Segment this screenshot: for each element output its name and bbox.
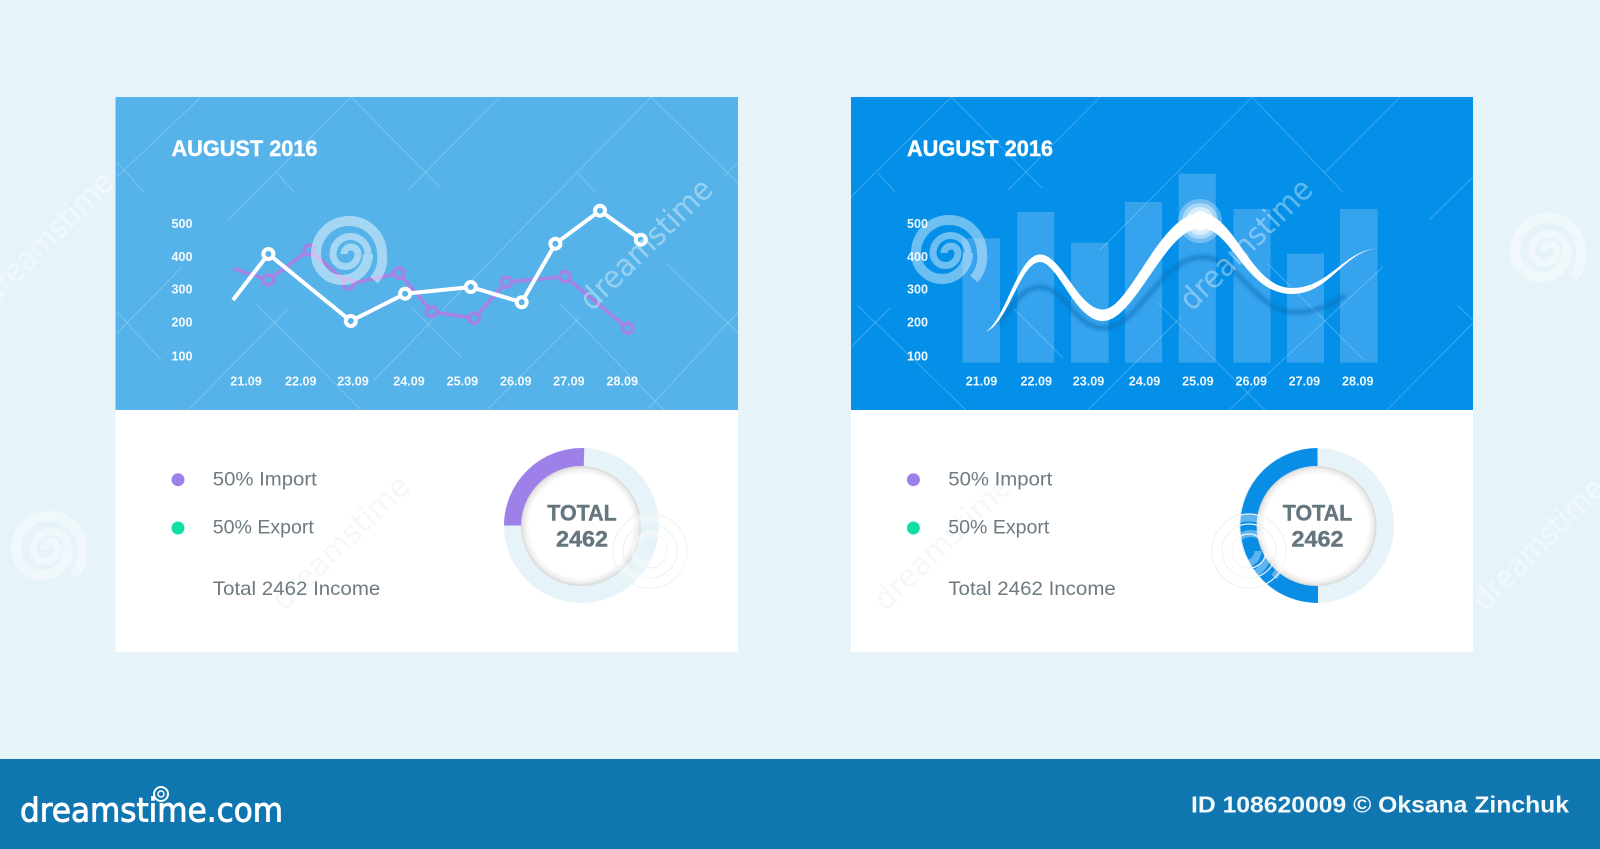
legend bbox=[907, 469, 1116, 600]
heading: AUGUST 2016 bbox=[172, 136, 318, 161]
y axis labels: 300 bbox=[172, 283, 193, 297]
x axis labels: 25.09 bbox=[447, 375, 478, 389]
y axis labels bbox=[172, 217, 193, 363]
y axis labels: 100 bbox=[907, 349, 928, 363]
y axis labels: 500 bbox=[172, 217, 193, 231]
chart background bbox=[851, 97, 1473, 410]
heading: AUGUST 2016 bbox=[907, 136, 1053, 161]
x axis labels: 27.09 bbox=[553, 375, 585, 389]
y axis labels: 100 bbox=[172, 349, 193, 363]
legend: Total 2462 Income bbox=[213, 578, 380, 600]
y axis labels: 400 bbox=[172, 250, 193, 264]
donut chart: TOTAL bbox=[547, 501, 617, 526]
donut chart bbox=[513, 457, 650, 594]
donut chart: 2462 bbox=[1292, 527, 1344, 552]
x axis labels: 21.09 bbox=[966, 375, 997, 389]
x axis labels: 23.09 bbox=[1073, 375, 1104, 389]
x axis labels bbox=[966, 375, 1374, 389]
legend: Total 2462 Income bbox=[948, 578, 1116, 600]
faint wordmark: dreamstime bbox=[867, 468, 1020, 618]
watermark swirl bbox=[316, 221, 382, 280]
legend bbox=[172, 469, 380, 600]
panel: bar and curve dashboard bbox=[851, 97, 1473, 652]
footer logo: dreamstime.com bbox=[20, 791, 283, 830]
watermark wordmark: dreamstime bbox=[1172, 171, 1320, 318]
footer credit: ID 108620009 © Oksana Zinchuk bbox=[1191, 791, 1570, 817]
x axis labels: 23.09 bbox=[337, 375, 369, 389]
x axis labels bbox=[230, 375, 638, 389]
x axis labels: 26.09 bbox=[500, 375, 532, 389]
lower white card bbox=[851, 410, 1473, 652]
white export line bbox=[233, 206, 646, 326]
x axis labels: 28.09 bbox=[607, 375, 638, 389]
y axis labels: 200 bbox=[907, 316, 928, 330]
lower white card bbox=[116, 410, 738, 652]
watermark rings bbox=[613, 514, 687, 588]
legend: 50% Export bbox=[213, 516, 314, 538]
purple import line bbox=[233, 245, 633, 333]
chart background bbox=[116, 97, 738, 410]
panel: line chart dashboard bbox=[116, 97, 738, 652]
footer band bbox=[0, 759, 1600, 849]
watermark wordmark: dreamstime bbox=[572, 171, 720, 318]
x axis labels: 26.09 bbox=[1236, 375, 1267, 389]
x axis labels: 28.09 bbox=[1342, 375, 1374, 389]
watermark swirl bbox=[916, 220, 982, 279]
faint wordmark: dreamstime bbox=[265, 468, 418, 618]
x axis labels: 24.09 bbox=[1129, 375, 1160, 389]
y axis labels: 400 bbox=[907, 250, 928, 264]
watermark rings bbox=[1212, 514, 1286, 588]
y axis labels bbox=[907, 217, 928, 363]
x axis labels: 27.09 bbox=[1289, 375, 1320, 389]
y axis labels: 500 bbox=[907, 217, 928, 231]
background watermark right swirl bbox=[1515, 218, 1581, 277]
x axis labels: 21.09 bbox=[230, 375, 262, 389]
highlight dot bbox=[1191, 212, 1210, 230]
donut chart: TOTAL bbox=[1283, 501, 1352, 526]
donut chart bbox=[1248, 457, 1385, 594]
y axis labels: 200 bbox=[172, 316, 193, 330]
x axis labels: 22.09 bbox=[285, 375, 317, 389]
white curve bbox=[985, 213, 1378, 332]
y axis labels: 300 bbox=[907, 283, 928, 297]
curve shadow bbox=[1000, 257, 1345, 328]
legend: 50% Export bbox=[948, 516, 1050, 538]
background watermark left swirl bbox=[16, 516, 82, 575]
x axis labels: 24.09 bbox=[393, 375, 425, 389]
bars bbox=[962, 174, 1378, 363]
x axis labels: 25.09 bbox=[1182, 375, 1214, 389]
highlight glow bbox=[1178, 199, 1222, 243]
x axis labels: 22.09 bbox=[1021, 375, 1052, 389]
donut chart: 2462 bbox=[556, 527, 608, 552]
legend: 50% Import bbox=[948, 469, 1053, 491]
legend: 50% Import bbox=[213, 469, 317, 491]
